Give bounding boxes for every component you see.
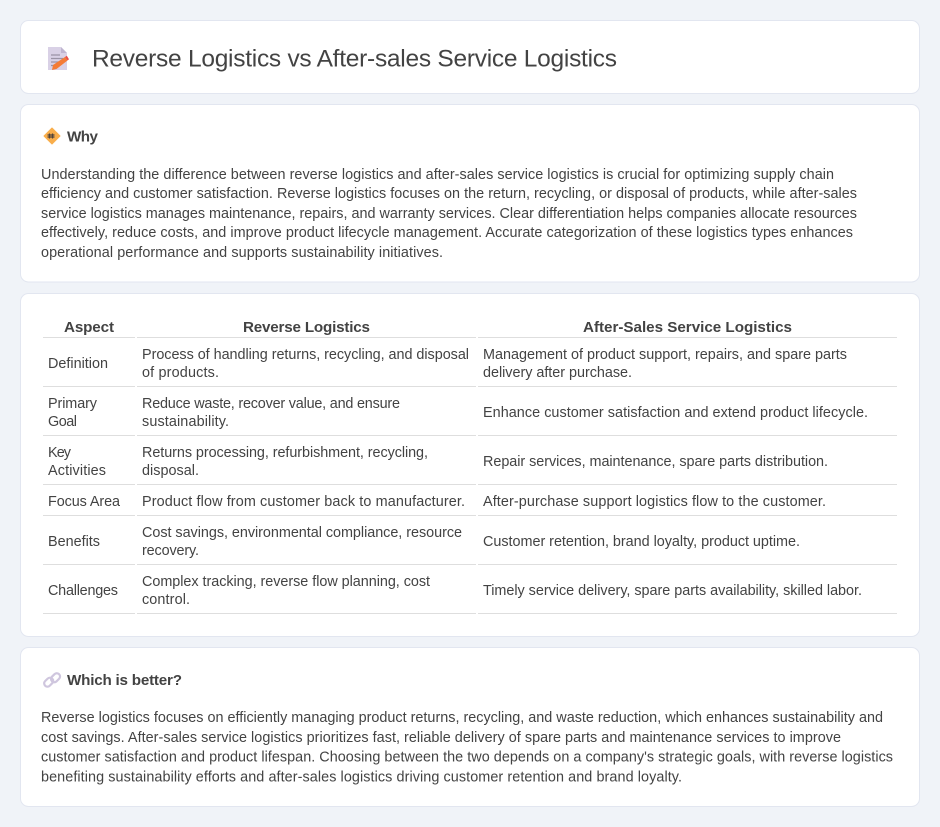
table row: key activities: Repair services, maintenance, spare parts distribution. [483,454,828,470]
table row: primary goal: Enhance customer satisfaction and extend product lifecycle. [483,405,868,421]
table row: definition [43,347,897,387]
table header row: Aspect [64,319,114,336]
icon: memo with pencil [48,47,69,70]
table row: challenges: control. [142,592,190,608]
table row: primary goal: Reduce waste, recover value, and ensure [142,396,400,412]
table row: definition: Process of handling returns, recycling, and disposal [142,347,469,363]
table row: primary goal: Goal [48,414,77,430]
title: Reverse Logistics vs After-sales Service Logistics [92,46,617,72]
table row: challenges: Timely service delivery, spare parts availability, skilled labor. [483,583,862,599]
text block: why paragraph: effectively, reduce costs, and improve product lifecycle management. Accurate categorization of these logistics types enhances [41,225,853,241]
table row: definition: delivery after purchase. [483,365,632,381]
panel: why [20,104,920,282]
text block: why paragraph: operational performance and supports sustainability initiatives. [41,245,443,261]
text block: why paragraph [41,167,857,261]
table header row: Reverse Logistics [243,319,370,336]
text block: why paragraph: Understanding the difference between reverse logistics and after-sales service logistics is crucial for optimizing supply chain [41,167,834,183]
table row: focus area [43,494,897,516]
table header row [43,319,897,338]
panel: comparison table [20,294,920,636]
table row: key activities: Key [48,445,72,461]
table header row: After-Sales Service Logistics [583,319,792,336]
table row: focus area: Product flow from customer back to manufacturer. [142,494,465,510]
table row: focus area: Focus Area [48,494,120,510]
table row: key activities: Returns processing, refurbishment, recycling, [142,445,428,461]
panel: which is better [20,648,920,806]
table row: definition: of products. [142,365,219,381]
table row: key activities: Activities [48,463,106,479]
table row: challenges [43,574,897,614]
table row: key activities [43,445,897,485]
table row: key activities: disposal. [142,463,199,479]
table row: benefits: Benefits [48,534,100,550]
table row: benefits [43,525,897,565]
table row: benefits: recovery. [142,543,199,559]
text block: which is better paragraph: customer satisfaction and product lifespan. Choosing between the two depends on a company's strategic goals, with reverse logistics [41,750,893,766]
heading: which is better: Which is better? [67,672,182,689]
text block: which is better paragraph [41,710,893,786]
text block: which is better paragraph: Reverse logistics focuses on efficiently managing product returns, recycling, and waste reduction, which enhances sustainability and [41,710,883,726]
text block: why paragraph: service logistics manages maintenance, repairs, and warranty services. Clear differentiation helps companies allocate resources [41,206,857,222]
text block: which is better paragraph: benefiting sustainability efforts and after-sales logistics driving customer retention and brand loyalty. [41,770,682,786]
table row: definition: Management of product support, repairs, and spare parts [483,347,847,363]
table row: focus area: After-purchase support logistics flow to the customer. [483,494,826,510]
icon: warning diamond [44,128,60,144]
table row: primary goal: sustainability. [142,414,229,430]
table row: benefits: Customer retention, brand loyalty, product uptime. [483,534,800,550]
table row: challenges: Complex tracking, reverse flow planning, cost [142,574,430,590]
icon: chain link [43,672,61,688]
panel: title header [20,20,920,94]
heading: why: Why [67,128,99,146]
table row: benefits: Cost savings, environmental compliance, resource [142,525,462,541]
table row: challenges: Challenges [48,583,118,599]
text block: why paragraph: efficiency and customer satisfaction. Reverse logistics focuses on the return, recycling, or disposal of products, while after-sales [41,186,857,202]
table row: primary goal: Primary [48,396,98,412]
text block: which is better paragraph: cost savings. After-sales service logistics prioritizes fast, reliable delivery of spare parts and maintenance services to improve [41,730,841,746]
table row: definition: Definition [48,356,108,372]
table row: primary goal [43,396,897,436]
